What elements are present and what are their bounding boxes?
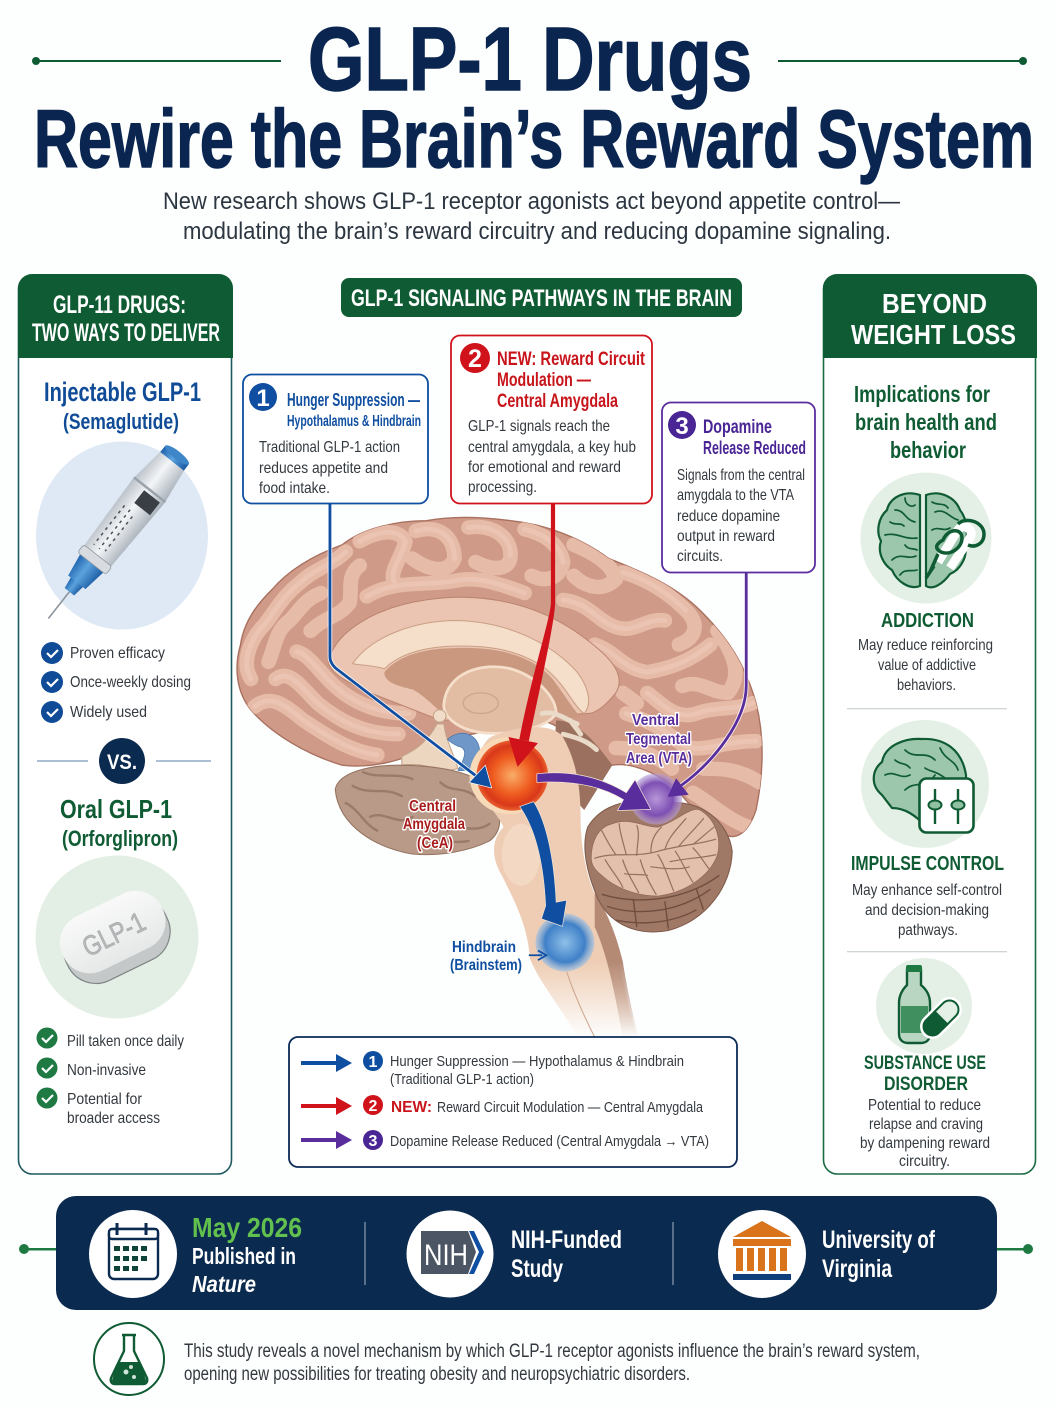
callout 2: reward circuit modulation: Modulation — bbox=[497, 370, 591, 391]
brainstem bbox=[475, 727, 639, 1037]
cerebellum bbox=[585, 801, 732, 932]
impulse control text: and decision-making bbox=[865, 902, 989, 919]
panel heading text bbox=[851, 288, 1016, 350]
study connector right bbox=[996, 1244, 1033, 1254]
label: ventral tegmental area: Area (VTA) bbox=[626, 750, 692, 767]
oral benefits list: Potential for bbox=[67, 1091, 143, 1108]
panel: two ways to deliver bbox=[18, 274, 233, 1174]
panel header bbox=[18, 274, 233, 358]
legend row 1: Hunger Suppression — Hypothalamus & Hindbrain bbox=[390, 1053, 684, 1070]
panel header bbox=[823, 274, 1037, 358]
callout 2: reward circuit modulation: for emotional and reward bbox=[468, 459, 621, 476]
panel heading text: BEYOND bbox=[882, 288, 987, 319]
title ornament right bbox=[778, 57, 1027, 65]
arrow: amygdala to hindbrain bbox=[520, 802, 567, 926]
icon: calendar bbox=[89, 1210, 177, 1298]
panel heading text bbox=[32, 291, 220, 347]
substance use disorder text: Potential to reduce bbox=[868, 1097, 981, 1114]
callout 1: hunger suppression: food intake. bbox=[259, 480, 330, 497]
label: hindbrain: (Brainstem) bbox=[450, 957, 522, 974]
arrow: amygdala to VTA bbox=[537, 773, 651, 811]
addiction text: behaviors. bbox=[897, 677, 956, 694]
icon: brain with broken chain bbox=[860, 472, 992, 604]
addiction text: value of addictive bbox=[878, 657, 976, 674]
callout 2: reward circuit modulation: Central Amygdala bbox=[497, 391, 618, 412]
panel heading text: WEIGHT LOSS bbox=[851, 319, 1016, 350]
callout 1: hunger suppression: Hunger Suppression — bbox=[287, 390, 420, 410]
callout 3: dopamine release reduced: output in reward bbox=[677, 528, 775, 545]
oral benefits list: Non-invasive bbox=[67, 1062, 146, 1079]
subtitle bbox=[163, 188, 900, 245]
subtitle: modulating the brain’s reward circuitry and reducing dopamine signaling. bbox=[183, 218, 891, 245]
title ornament left bbox=[32, 57, 281, 65]
legend row 2: Reward Circuit Modulation — Central Amygdala bbox=[437, 1099, 704, 1116]
label: hindbrain: Hindbrain bbox=[452, 939, 516, 956]
temporal lobe bbox=[335, 765, 500, 855]
center heading bbox=[341, 278, 742, 317]
impulse control text: IMPULSE CONTROL bbox=[851, 853, 1004, 875]
callout 2: reward circuit modulation bbox=[451, 336, 652, 504]
substance use disorder text: SUBSTANCE USE bbox=[864, 1053, 986, 1074]
callout 3: dopamine release reduced: amygdala to the VTA bbox=[677, 487, 794, 504]
panel heading text: GLP-11 DRUGS: bbox=[53, 291, 186, 319]
addiction text: ADDICTION bbox=[881, 610, 974, 632]
legend row 3: 3 bbox=[369, 1133, 378, 1150]
title: GLP-1 Drugs: GLP-1 Drugs bbox=[308, 10, 752, 110]
callout 1: hunger suppression bbox=[243, 374, 428, 504]
callout 3: dopamine release reduced: 3 bbox=[675, 413, 689, 440]
callout 2: reward circuit modulation: central amygdala, a key hub bbox=[468, 439, 636, 456]
fornix and hypothalamic structures bbox=[402, 710, 596, 772]
corpus callosum bbox=[353, 621, 589, 714]
study connector left bbox=[19, 1244, 58, 1254]
injectable benefits list: Once-weekly dosing bbox=[70, 674, 191, 691]
callout 3: dopamine release reduced bbox=[662, 402, 815, 572]
callout 2: reward circuit modulation: GLP-1 signals reach the bbox=[468, 418, 610, 435]
study info banner bbox=[56, 1196, 997, 1310]
center heading: GLP-1 SIGNALING PATHWAYS IN THE BRAIN bbox=[351, 285, 732, 312]
substance use disorder text: by dampening reward bbox=[860, 1135, 990, 1152]
oral benefits list bbox=[36, 1028, 184, 1127]
publication text: Published in bbox=[192, 1243, 296, 1269]
label: central amygdala: Central bbox=[409, 798, 456, 815]
label: central amygdala: (CeA) bbox=[417, 835, 453, 852]
publication text bbox=[192, 1212, 302, 1297]
callout 3: dopamine release reduced: Signals from the central bbox=[677, 467, 805, 484]
legend row 3 bbox=[301, 1130, 709, 1150]
injectable heading: (Semaglutide) bbox=[63, 409, 179, 434]
rear deep region bbox=[553, 720, 612, 810]
hindbrain hotspot bbox=[535, 914, 594, 971]
label: ventral tegmental area: Ventral bbox=[632, 712, 679, 729]
VTA hotspot bbox=[630, 773, 682, 824]
callout 1: hunger suppression: Hypothalamus & Hindbrain bbox=[287, 413, 421, 430]
oral benefits list: broader access bbox=[67, 1110, 160, 1127]
legend row 1: (Traditional GLP-1 action) bbox=[390, 1071, 534, 1088]
conclusion text bbox=[184, 1341, 920, 1385]
substance use disorder text: DISORDER bbox=[884, 1074, 968, 1095]
impulse control text: May enhance self-control bbox=[852, 882, 1002, 899]
addiction text: May reduce reinforcing bbox=[858, 637, 993, 654]
callout 1: hunger suppression: reduces appetite and bbox=[259, 460, 388, 477]
panel heading text: TWO WAYS TO DELIVER bbox=[32, 319, 220, 347]
legend row 2: NEW: bbox=[391, 1099, 432, 1116]
injectable benefits list: Proven efficacy bbox=[70, 645, 165, 662]
substance use disorder text: circuitry. bbox=[899, 1153, 950, 1170]
label: hindbrain bbox=[450, 939, 522, 974]
addiction text bbox=[858, 610, 993, 694]
implications subheading bbox=[854, 381, 997, 463]
arrow: red pathway to amygdala bbox=[508, 503, 555, 767]
icon: pill: GLP-1 bbox=[77, 906, 150, 963]
impulse control text: pathways. bbox=[898, 922, 958, 939]
callout 1: hunger suppression: Traditional GLP-1 action bbox=[259, 439, 400, 456]
VS badge bbox=[37, 738, 211, 784]
icon: university building bbox=[718, 1210, 806, 1298]
conclusion text: opening new possibilities for treating obesity and neuropsychiatric disorders. bbox=[184, 1364, 690, 1385]
label: ventral tegmental area: Tegmental bbox=[626, 731, 691, 748]
legend row 1 bbox=[301, 1051, 684, 1088]
hypothalamus blue bbox=[447, 733, 480, 771]
arrow: blue pathway to amygdala bbox=[330, 503, 492, 788]
panel: beyond weight loss bbox=[823, 274, 1037, 1174]
impulse control text bbox=[851, 853, 1004, 939]
legend row 2: 2 bbox=[369, 1098, 378, 1115]
callout 2: reward circuit modulation: NEW: Reward Circuit bbox=[497, 349, 646, 370]
injectable benefits list bbox=[41, 642, 191, 723]
implications subheading: behavior bbox=[890, 437, 966, 463]
substance use disorder text bbox=[860, 1053, 990, 1170]
icon: pill bbox=[36, 856, 198, 1018]
callout 3: dopamine release reduced: circuits. bbox=[677, 548, 723, 565]
injectable benefits list: Widely used bbox=[70, 704, 147, 721]
label: ventral tegmental area bbox=[626, 712, 692, 767]
callout 3: dopamine release reduced: reduce dopamine bbox=[677, 508, 780, 525]
arrow: hindbrain pointer bbox=[529, 950, 546, 960]
icon: injector pen bbox=[33, 439, 208, 631]
inner cavity bbox=[384, 648, 581, 724]
icon: bottle and capsule bbox=[876, 958, 972, 1054]
thalamus bbox=[444, 667, 556, 733]
publication text: May 2026 bbox=[192, 1212, 302, 1243]
cortical folds bbox=[247, 527, 760, 827]
cerebrum bbox=[237, 517, 762, 837]
oral benefits list: Pill taken once daily bbox=[67, 1033, 184, 1050]
callout 1: hunger suppression: 1 bbox=[256, 385, 270, 412]
icon: NIH logo: NIH bbox=[424, 1239, 468, 1272]
callout 2: reward circuit modulation: processing. bbox=[468, 479, 537, 496]
university text bbox=[822, 1226, 935, 1283]
label: central amygdala: Amygdala bbox=[403, 816, 465, 833]
legend bbox=[289, 1037, 737, 1167]
legend row 3: Dopamine Release Reduced (Central Amygdala → VTA) bbox=[390, 1133, 709, 1150]
NIH text: NIH-Funded bbox=[511, 1226, 622, 1254]
callout 3: dopamine release reduced: Release Reduced bbox=[703, 438, 806, 458]
NIH text bbox=[511, 1226, 622, 1283]
legend row 2 bbox=[301, 1095, 704, 1116]
substance use disorder text: relapse and craving bbox=[869, 1116, 983, 1133]
legend row 1: 1 bbox=[369, 1054, 378, 1071]
brain illustration bbox=[237, 503, 762, 1037]
icon: flask bbox=[94, 1323, 164, 1395]
NIH text: Study bbox=[511, 1255, 563, 1283]
implications subheading: Implications for bbox=[854, 381, 990, 407]
callout 3: dopamine release reduced: Dopamine bbox=[703, 417, 772, 438]
oral heading bbox=[60, 794, 178, 851]
icon: brain with control sliders bbox=[861, 720, 989, 848]
injectable heading: Injectable GLP-1 bbox=[44, 377, 201, 407]
label: central amygdala bbox=[403, 798, 465, 852]
central amygdala hotspot bbox=[470, 737, 548, 814]
VS badge: VS. bbox=[107, 751, 137, 774]
university text: University of bbox=[822, 1226, 935, 1254]
oral heading: Oral GLP-1 bbox=[60, 794, 172, 824]
icon: NIH logo bbox=[406, 1210, 494, 1298]
implications subheading: brain health and bbox=[855, 409, 997, 435]
university text: Virginia bbox=[822, 1255, 893, 1283]
arrow: purple pathway to VTA bbox=[668, 572, 746, 797]
publication text: Nature bbox=[192, 1271, 256, 1297]
cingulate gyrus bbox=[328, 597, 619, 720]
callout 2: reward circuit modulation: 2 bbox=[468, 345, 482, 373]
oral heading: (Orforglipron) bbox=[62, 826, 178, 851]
injectable heading bbox=[44, 377, 201, 434]
subtitle: New research shows GLP-1 receptor agonists act beyond appetite control— bbox=[163, 188, 900, 215]
